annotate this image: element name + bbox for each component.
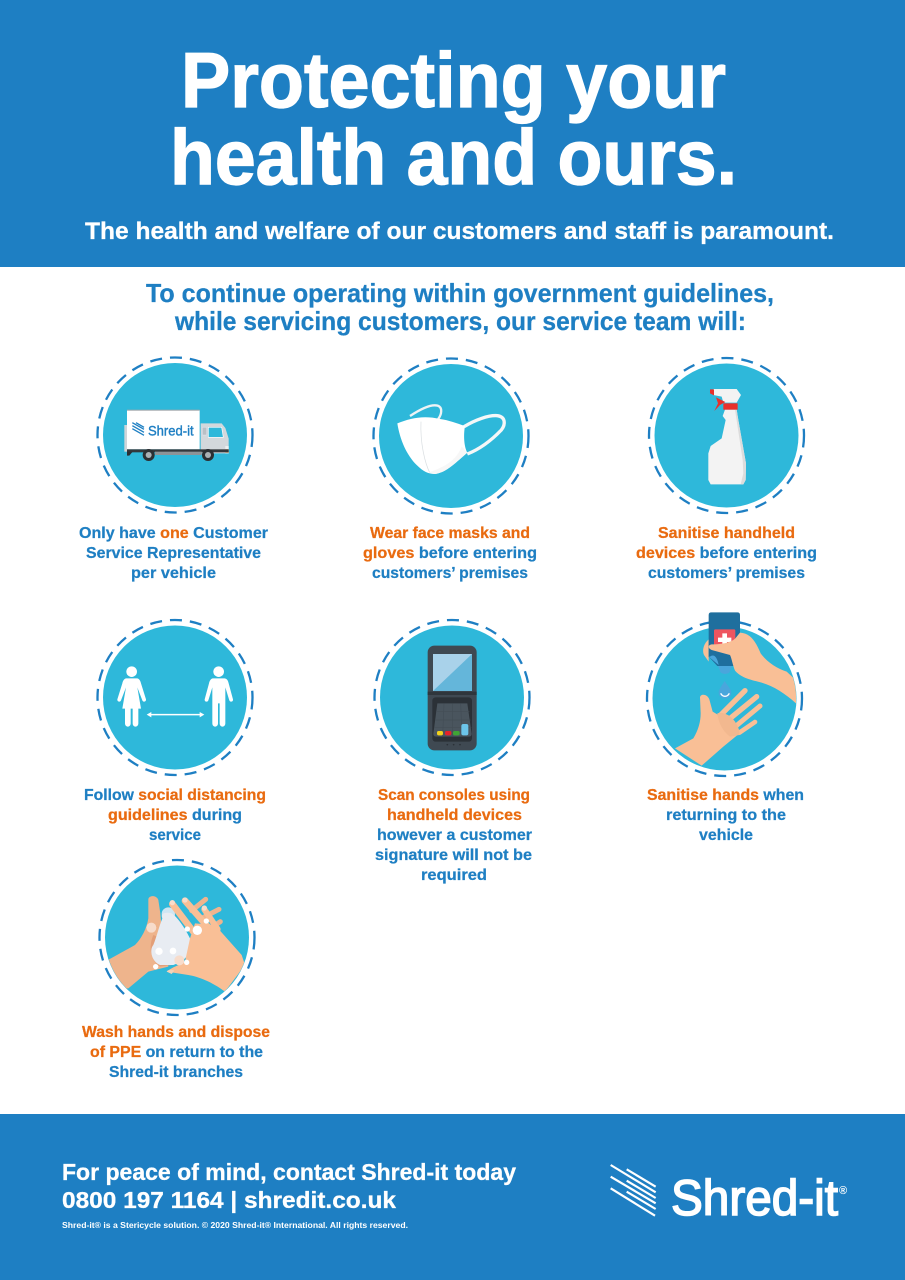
icon: hands washing with foam <box>105 896 245 992</box>
item: sanitise hands <box>647 612 804 844</box>
section heading: To continue operating within government guidelines, <box>146 278 774 308</box>
caption: Sanitise handheld <box>658 525 795 542</box>
item: face masks and gloves <box>363 358 537 582</box>
caption <box>363 525 537 582</box>
icon: two people with distance arrow <box>117 666 233 727</box>
item: wash hands and dispose of PPE <box>82 860 270 1081</box>
caption: Sanitise hands when <box>647 787 804 804</box>
caption: Wash hands and dispose <box>82 1024 270 1041</box>
caption <box>79 525 268 582</box>
caption <box>636 525 817 582</box>
section heading <box>146 278 774 336</box>
logo: Shred-it <box>611 1165 847 1226</box>
caption: service <box>149 827 201 844</box>
item: one representative per vehicle <box>79 358 268 582</box>
contact text <box>62 1159 516 1213</box>
icon: Shred-it truck <box>124 410 229 461</box>
footer panel <box>0 1114 905 1280</box>
title <box>170 36 737 201</box>
logo: Shred-it: ® <box>839 1185 847 1197</box>
header panel <box>0 0 905 267</box>
caption: vehicle <box>699 827 753 844</box>
caption <box>82 1024 270 1081</box>
caption: Shred-it branches <box>109 1064 243 1081</box>
caption: handheld devices <box>387 807 522 824</box>
icon: spray bottle <box>708 389 746 484</box>
caption: Service Representative <box>86 545 261 562</box>
caption: Wear face masks and <box>370 525 530 542</box>
title: Protecting your <box>181 36 726 124</box>
caption: of PPE on return to the <box>90 1044 263 1061</box>
icon: face mask <box>397 405 504 474</box>
item: sanitise handheld devices <box>636 358 817 582</box>
contact text: For peace of mind, contact Shred-it today <box>62 1159 516 1185</box>
legal line: Shred-it® is a Stericycle solution. © 2020 Shred-it® International. All rights reserved. <box>62 1220 408 1230</box>
caption <box>84 787 266 844</box>
caption: guidelines during <box>108 807 242 824</box>
caption: devices before entering <box>636 545 817 562</box>
caption: Follow social distancing <box>84 787 266 804</box>
item: social distancing <box>84 620 266 844</box>
caption <box>375 787 532 884</box>
icon: Shred-it truck: Shred-it <box>148 422 194 438</box>
caption: per vehicle <box>131 565 216 582</box>
item: scan consoles <box>374 620 532 884</box>
caption: returning to the <box>666 807 786 824</box>
logo: Shred-it: Shred-it <box>671 1170 838 1226</box>
caption: Only have one Customer <box>79 525 268 542</box>
icon: handheld scanner <box>428 646 477 750</box>
caption: customers’ premises <box>648 565 805 582</box>
caption: customers’ premises <box>372 565 528 582</box>
caption: gloves before entering <box>363 545 537 562</box>
caption: Scan consoles using <box>378 787 530 804</box>
icon: hand sanitiser <box>675 612 797 766</box>
caption: required <box>421 867 487 884</box>
caption <box>647 787 804 844</box>
caption: however a customer <box>377 827 532 844</box>
section heading: while servicing customers, our service team will: <box>174 306 746 336</box>
caption: signature will not be <box>375 847 532 864</box>
contact text: 0800 197 1164 | shredit.co.uk <box>62 1187 396 1213</box>
subtitle: The health and welfare of our customers and staff is paramount. <box>85 218 834 245</box>
title: health and ours. <box>170 113 737 201</box>
